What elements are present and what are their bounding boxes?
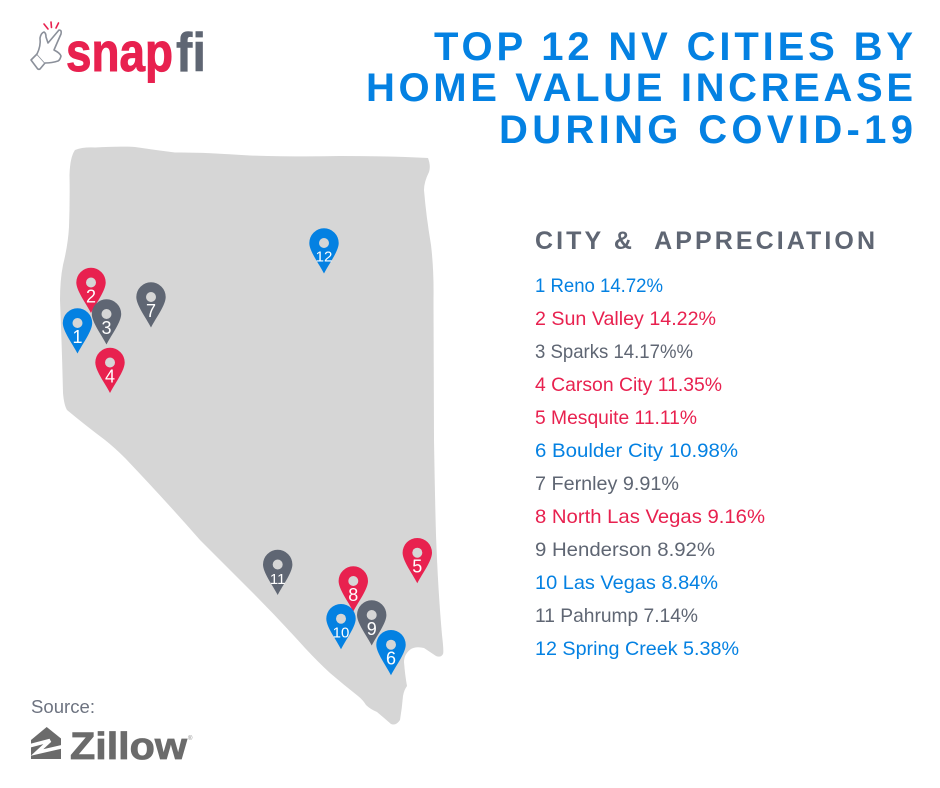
logo wordmark: fi: fi: [176, 21, 206, 83]
map pins: [63, 228, 432, 675]
city list: 11 Pahrump 7.14%: [535, 605, 698, 627]
icon: snapping hand: [31, 22, 61, 69]
city list: 1 Reno 14.72%: [535, 275, 663, 297]
city list: 12 Spring Creek 5.38%: [535, 638, 739, 660]
city list: 2 Sun Valley 14.22%: [535, 308, 716, 330]
pin 8 North Las Vegas: [339, 566, 368, 612]
city list: 8 North Las Vegas 9.16%: [535, 506, 765, 528]
title: DURING COVID-19: [499, 108, 913, 152]
pin 7 Fernley: 7: [146, 301, 156, 321]
title: [366, 25, 913, 152]
pin 12 Spring Creek: 12: [316, 248, 332, 266]
pin 6 Boulder City: 6: [386, 649, 396, 669]
city list: 3 Sparks 14.17%%: [535, 341, 693, 363]
pin 6 Boulder City: [376, 630, 406, 675]
city list: [535, 275, 765, 660]
pin 8 North Las Vegas: 8: [348, 585, 358, 605]
pin 12 Spring Creek: [309, 228, 339, 274]
pin 7 Fernley: [136, 282, 166, 328]
pin 10 Las Vegas: 10: [333, 625, 349, 642]
pin 9 Henderson: [357, 600, 386, 646]
pin 1 Reno: 1: [72, 327, 83, 347]
pin 11 Pahrump: 11: [270, 571, 285, 588]
pin 1 Reno: [63, 308, 92, 354]
pin 11 Pahrump: [263, 550, 292, 595]
pin 2 Sun Valley: [76, 268, 106, 313]
pin 4 Carson City: [95, 348, 125, 393]
city list: 7 Fernley 9.91%: [535, 473, 679, 495]
map: Nevada silhouette: [60, 147, 443, 725]
icon: zillow house: [29, 727, 63, 759]
city list: 4 Carson City 11.35%: [535, 374, 722, 396]
zillow logo: [29, 726, 193, 768]
pin 9 Henderson: 9: [367, 619, 377, 639]
legend heading: CITY & APPRECIATION: [535, 227, 875, 255]
city list: 5 Mesquite 11.11%: [535, 407, 697, 429]
logo: snapfi: [31, 21, 206, 83]
city list: 10 Las Vegas 8.84%: [535, 572, 718, 594]
city list: 9 Henderson 8.92%: [535, 539, 715, 561]
pin 5 Mesquite: 5: [412, 557, 422, 577]
title: TOP 12 NV CITIES BY: [434, 25, 913, 69]
pin 10 Las Vegas: [326, 604, 356, 649]
city list: 6 Boulder City 10.98%: [535, 440, 738, 462]
logo wordmark: snap: snap: [66, 21, 173, 83]
pin 5 Mesquite: [403, 538, 432, 583]
zillow wordmark: Zillow: [70, 726, 187, 768]
pin 4 Carson City: 4: [105, 366, 115, 386]
pin 3 Sparks: [92, 299, 121, 344]
registered mark: ®: [188, 735, 193, 742]
pin 2 Sun Valley: 2: [86, 286, 96, 306]
source label: Source:: [31, 697, 95, 717]
title: HOME VALUE INCREASE: [366, 66, 913, 110]
pin 3 Sparks: 3: [101, 318, 112, 338]
